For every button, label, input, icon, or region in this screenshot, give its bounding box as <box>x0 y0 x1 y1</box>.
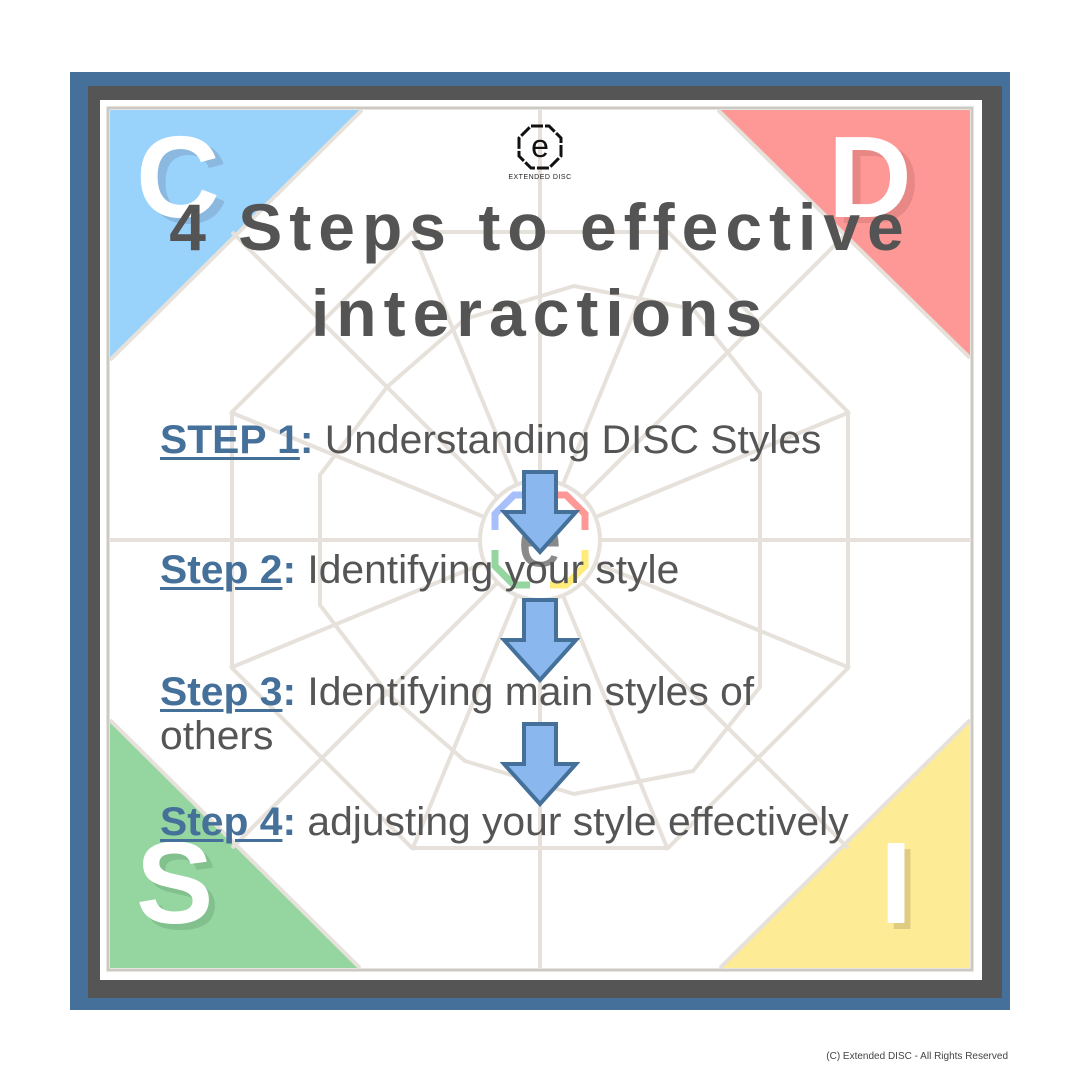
title: 4 Steps to effective <box>169 190 911 264</box>
letter S: S <box>136 818 213 948</box>
letter D: D <box>828 112 912 242</box>
step 4: Step 4: adjusting your style effectively <box>160 800 849 844</box>
step 3 <box>160 670 754 758</box>
center logo ring <box>492 492 588 588</box>
letter C: C <box>136 112 220 242</box>
logo: e <box>531 128 549 164</box>
step 3: Step 3: Identifying main styles of <box>160 670 754 714</box>
logo: EXTENDED DISC <box>508 174 572 181</box>
step 1: STEP 1: Understanding DISC Styles <box>160 418 821 462</box>
corner triangles <box>110 110 362 360</box>
step 2: Step 2: Identifying your style <box>160 548 679 592</box>
arrow 3 <box>500 722 580 807</box>
arrow 1 <box>500 470 580 555</box>
title: interactions <box>311 276 769 350</box>
center logo ring: e <box>518 494 562 583</box>
letter I: I <box>880 818 912 948</box>
logo <box>508 124 572 181</box>
title <box>169 190 911 350</box>
step 3: others <box>160 714 273 758</box>
arrow 2 <box>500 598 580 683</box>
footer copyright: (C) Extended DISC - All Rights Reserved <box>826 1051 1008 1062</box>
